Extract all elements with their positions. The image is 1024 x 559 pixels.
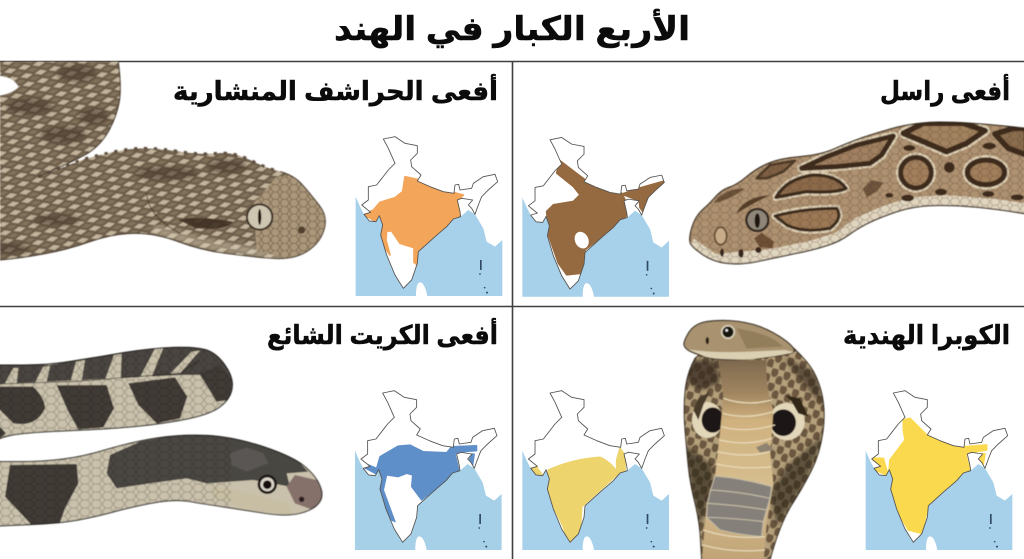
- illustration: common krait: [0, 340, 332, 530]
- illustration: Russell's viper: [688, 120, 1024, 266]
- grey bands: [707, 476, 772, 537]
- illustration: saw-scaled viper: [0, 60, 333, 263]
- eye: [259, 476, 276, 493]
- nostril: [299, 497, 304, 502]
- nostril: [715, 227, 727, 245]
- lips: [720, 247, 761, 258]
- map: Russell's viper range: [522, 137, 669, 297]
- head tone: [253, 175, 328, 260]
- heading: common krait: أفعى الكريت الشائع: [267, 318, 498, 351]
- panel: Russell's viper: [522, 74, 1024, 297]
- title: الأربع الكبار في الهند: [334, 8, 690, 49]
- illustration: Indian cobra: [680, 317, 830, 559]
- serrated back edge: [38, 148, 280, 177]
- panel: common krait: [0, 318, 502, 550]
- map: saw-scaled viper range: [356, 137, 502, 296]
- heading: saw-scaled viper: أفعى الحراشف المنشارية: [173, 74, 498, 107]
- map: cobra range, left: [522, 391, 669, 550]
- belly: [702, 360, 773, 559]
- white coil gap: [0, 76, 18, 95]
- head stripes: [776, 175, 846, 197]
- lower-body dark: [107, 434, 308, 488]
- belly rings: [702, 398, 775, 551]
- panel: Indian cobra: [522, 317, 1012, 559]
- eye: [247, 204, 272, 230]
- panel: saw-scaled viper: [0, 60, 502, 296]
- head: [684, 321, 794, 360]
- map: common krait range: [355, 391, 502, 550]
- upper-body blotches: [0, 365, 232, 439]
- heading: Indian cobra: الكوبرا الهندية: [843, 320, 1010, 351]
- side rings: [896, 153, 936, 193]
- heading: Russell's viper: أفعى راسل: [880, 74, 1010, 106]
- hood: [684, 350, 824, 559]
- nostril: [298, 226, 305, 234]
- eye: [746, 209, 768, 231]
- dorsal blotches: [903, 123, 985, 152]
- map: cobra range, right: [866, 391, 1012, 550]
- spectacle marks: [692, 402, 723, 438]
- upper-band dark dorsal: [0, 347, 233, 402]
